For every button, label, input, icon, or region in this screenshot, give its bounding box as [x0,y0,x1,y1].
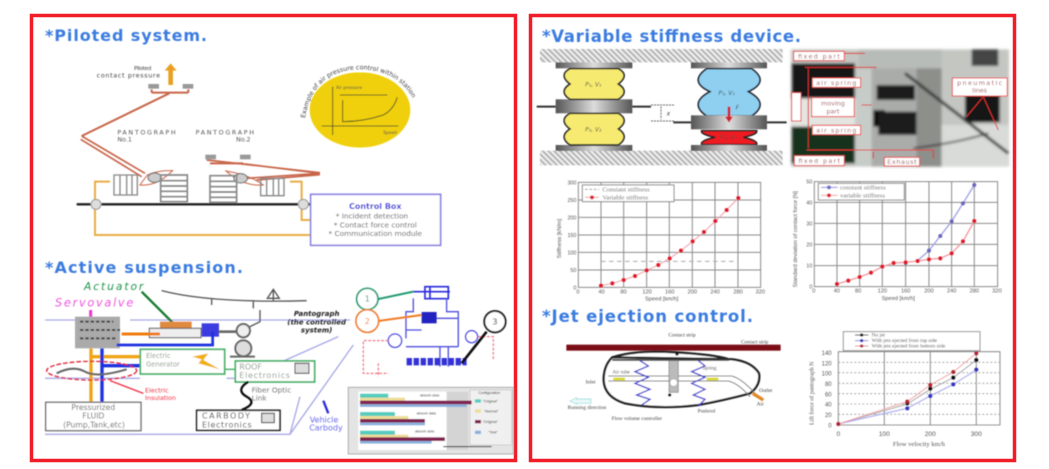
label: contact pressure: contact pressure [97,73,160,80]
y tick labels [567,180,576,291]
element: blue and red air springs [673,62,787,151]
axis labels: 40 [834,289,840,295]
labels: pantographs: No.1 [117,136,132,143]
diagram: active suspension: 2 [365,317,370,326]
heading: jet ejection control: *Jet ejection control. [542,307,753,326]
chart: inset bar chart [348,387,513,454]
axis labels: Standard deviation of contact force [N] [793,191,799,287]
chart: yellow air pressure ellipse: Example of air pressure control within station [300,64,416,118]
label: vehicle carbody: Vehicle [310,416,338,425]
chart: standard deviation vs speed [793,180,1002,302]
heading: active suspension: *Active suspension. [45,258,243,277]
labels: Air [757,402,764,408]
diagram: variable stiffness device [537,49,1009,167]
element: yellow air springs [537,62,651,151]
axis labels: 120 [822,361,832,367]
callout: control box: * Communication module [329,229,423,238]
label: vehicle carbody: Carbody [309,424,343,433]
axis labels: 40 [825,403,832,409]
axis labels: Speed [km/h] [882,296,915,302]
arrow: contact pressure [164,70,178,85]
variable series [601,198,738,286]
label: fiber optic link: Fiber Optic [252,386,291,395]
series [838,360,976,424]
element: blue and red air springs: F [736,104,740,111]
callout: carbody electronics: CARBODY [202,412,250,421]
axis labels: 280 [733,289,743,295]
element: yellow air springs: P₁, V₁ [585,82,602,89]
axis labels: 120 [642,289,652,295]
callout: pressurized fluid: FLUID [82,412,104,421]
callout: electric generator [140,349,225,374]
icon: servovalve block [75,310,120,348]
labels: Contact strip [741,339,769,345]
legend: Variable stiffness [602,194,649,201]
legend [840,184,886,199]
photo annotation labels: moving [821,101,845,108]
photo annotation labels: fixed part [798,158,841,165]
axis labels: 140 [822,351,832,357]
label: pantograph the controlled system: system) [301,327,332,335]
chart: inset bar chart: "Original" [483,420,499,424]
y tick labels: 300 [567,180,576,186]
label: fiber optic link: Link [252,394,267,403]
heading: variable stiffness device: *Variable stiffness device. [542,27,801,46]
chart: lift force vs flow velocity: 300 [971,431,982,438]
diagram: active suspension [45,280,513,454]
chart: yellow air pressure ellipse: Air pressure [336,85,362,91]
vehicle body outline [45,320,353,434]
legend [843,332,980,351]
collector head outline [604,352,759,407]
callout: control box [311,194,441,245]
label: pantograph the controlled system: (the controlled [287,319,347,327]
label: fiber optic link [241,382,291,410]
y tick labels: 40 [806,200,812,206]
actuator cylinder [149,322,255,357]
labels: Air tube [612,369,631,375]
photo annotation labels: fixed part [798,53,840,60]
y tick labels: 30 [806,221,812,227]
y tick labels: 200 [567,215,576,221]
element: electric insulation ellipse [47,361,176,402]
photo annotation labels: lines [972,88,987,95]
axis labels: 100 [822,372,832,378]
diagram: jet ejection [566,333,781,422]
chart: inset bar chart: "Original" [483,399,499,403]
photo: test rig [791,49,1009,167]
labels: pantographs [117,129,254,143]
labels: Pushrod [698,409,715,415]
photo annotation labels: air spring [816,80,856,87]
axis labels: 120 [878,289,887,295]
constant series [601,260,738,263]
arrow: actuator [142,292,176,326]
hydraulic lines [122,329,160,338]
callout: roof electronics: Electronics [239,371,290,380]
axis labels: 20 [825,413,832,419]
chart: inset bar chart: "Test" [488,431,498,435]
dimension: x offset [651,105,675,121]
axis labels: 160 [901,289,910,295]
diagram: active suspension: 3 [492,318,498,327]
axis labels: 280 [970,289,979,295]
chart: lift force vs flow velocity: Flow velocity km/h [893,441,946,448]
element: blue and red air springs: P₂, V₂ [720,134,737,141]
axis labels: 80 [825,382,832,388]
axis labels: 320 [992,289,1002,295]
label: servovalve: Servovalve [55,296,133,310]
heading: piloted system: *Piloted system. [45,26,207,45]
variable series [837,221,974,284]
axis labels: 80 [620,289,627,295]
labels: pantographs: No.2 [236,136,251,143]
label: actuator: Actuator [83,280,144,293]
y tick labels: 0 [573,285,576,291]
chart: lift force vs flow velocity: 200 [925,431,936,438]
label: pantograph the controlled system [287,310,347,335]
contact strip [566,345,781,351]
chart: yellow air pressure ellipse [300,64,416,148]
chart: inset bar chart: absorb data [417,411,437,415]
chart: lift force vs flow velocity: 0 [836,431,840,438]
photo annotation labels: pneumatic [957,80,1003,87]
labels: Outlet [759,388,773,394]
y tick labels: 0 [809,285,812,291]
y tick labels: 50 [806,180,812,186]
callout: control box: Control Box [349,202,402,211]
callout: roof electronics: ROOF [239,362,262,371]
legend: variable stiffness [840,192,886,199]
callout: pressurized fluid: Pressurized [71,403,115,412]
axis labels: 200 [688,289,697,295]
dimension: x offset: x [666,110,671,117]
y tick labels: 10 [806,264,812,270]
y tick labels: 100 [567,250,576,256]
axis labels: 80 [855,289,861,295]
photo annotation labels [798,53,1003,166]
label: vehicle carbody [309,401,343,433]
chart: yellow air pressure ellipse: Speed [383,130,397,136]
photo annotation labels: Exhaust [887,159,917,166]
labels: Spring [702,365,717,371]
outlet pipe [753,393,763,400]
y tick labels: 150 [567,233,576,239]
legend: No jet [872,333,885,339]
axis labels: 320 [756,289,765,295]
legend: Constant stiffness [602,186,650,193]
callout: carbody electronics [197,410,280,430]
pantograph arm [162,289,307,330]
photo annotations [792,51,1007,166]
pantograph no.1 [81,84,193,202]
axis labels: 40 [598,289,605,295]
labels [568,333,773,422]
element: electric insulation ellipse: Insulation [145,395,176,402]
legend [602,186,650,201]
axis labels: 240 [947,289,956,295]
labels: pantographs: PANTOGRAPH [196,129,254,136]
axis labels: Stiffness [kN/m] [557,218,563,258]
photo annotation labels: part [826,109,840,116]
pantograph no.2 [205,155,320,202]
callout: electric generator: Generator [146,361,180,369]
legend: constant stiffness [840,184,886,191]
rail and wiring [77,182,310,235]
callout: roof electronics [225,361,315,382]
callout: control box: * Contact force control [334,220,417,229]
springs [635,361,705,406]
constant series [918,185,974,261]
hatch ceiling and floor [540,49,783,165]
labels: pantographs: PANTOGRAPH [117,129,176,136]
labels: Inlet [586,379,596,385]
air tubes [608,376,755,397]
axis labels [822,351,832,429]
callout: pressurized fluid: (Pump,Tank,etc) [63,420,125,429]
callout: control box: * Incident detection [336,212,409,221]
y tick labels: 250 [567,198,576,204]
panel: left frame [32,16,516,460]
label: contact pressure [97,66,160,80]
axis labels: 200 [924,289,934,295]
chart: lift force vs flow velocity [808,332,1000,448]
labels: Flow volume controller [612,416,662,422]
callout: carbody electronics: Electronics [202,420,252,429]
flow column [669,361,678,392]
photo annotation labels: air spring [816,127,856,134]
y tick labels: 50 [570,268,576,274]
labels: Running direction [568,405,607,411]
element: blue and red air springs: P₁, V₁ [718,90,735,97]
axis labels: 160 [665,289,674,295]
axis labels: 60 [825,393,832,399]
legend: With jets ejected from top side [872,337,938,344]
chart: inset bar chart: absorb data [415,430,435,434]
y tick labels [806,180,812,291]
running direction arrow [570,398,591,404]
axis labels: Speed [km/h] [645,297,679,303]
y tick labels: 20 [806,242,812,248]
hydraulic schematic [356,287,506,377]
axis labels: 0 [828,423,832,429]
labels: Contact strip [668,333,696,339]
axis labels [793,191,1002,302]
axis labels: 0 [812,289,815,295]
axis labels: 240 [710,289,720,295]
callout: pressurized fluid [46,402,141,431]
chart: inset bar chart: absorb data [420,394,440,398]
axis labels: 0 [576,289,579,295]
chart: lift force vs flow velocity: Lift force of pantograph N [808,361,815,425]
legend: With jets ejected from bottom side [872,343,946,350]
diagram: active suspension: 1 [365,295,370,304]
diagram: piloted system [76,62,442,247]
axis labels [557,218,765,303]
chart: inset bar chart: "Normal" [484,409,499,413]
callout: electric generator: Electric [146,352,171,360]
element: yellow air springs: P₂, V₂ [585,127,602,134]
label: contact pressure: Piloted [134,66,152,72]
chart: stiffness vs speed [557,180,765,303]
chart: inset bar chart: Configuration [478,391,500,395]
panel: right frame [530,16,1014,460]
element: electric insulation ellipse: Electric [145,388,169,395]
label: pantograph the controlled system: Pantograph [294,310,339,318]
chart: lift force vs flow velocity: 100 [879,431,890,438]
